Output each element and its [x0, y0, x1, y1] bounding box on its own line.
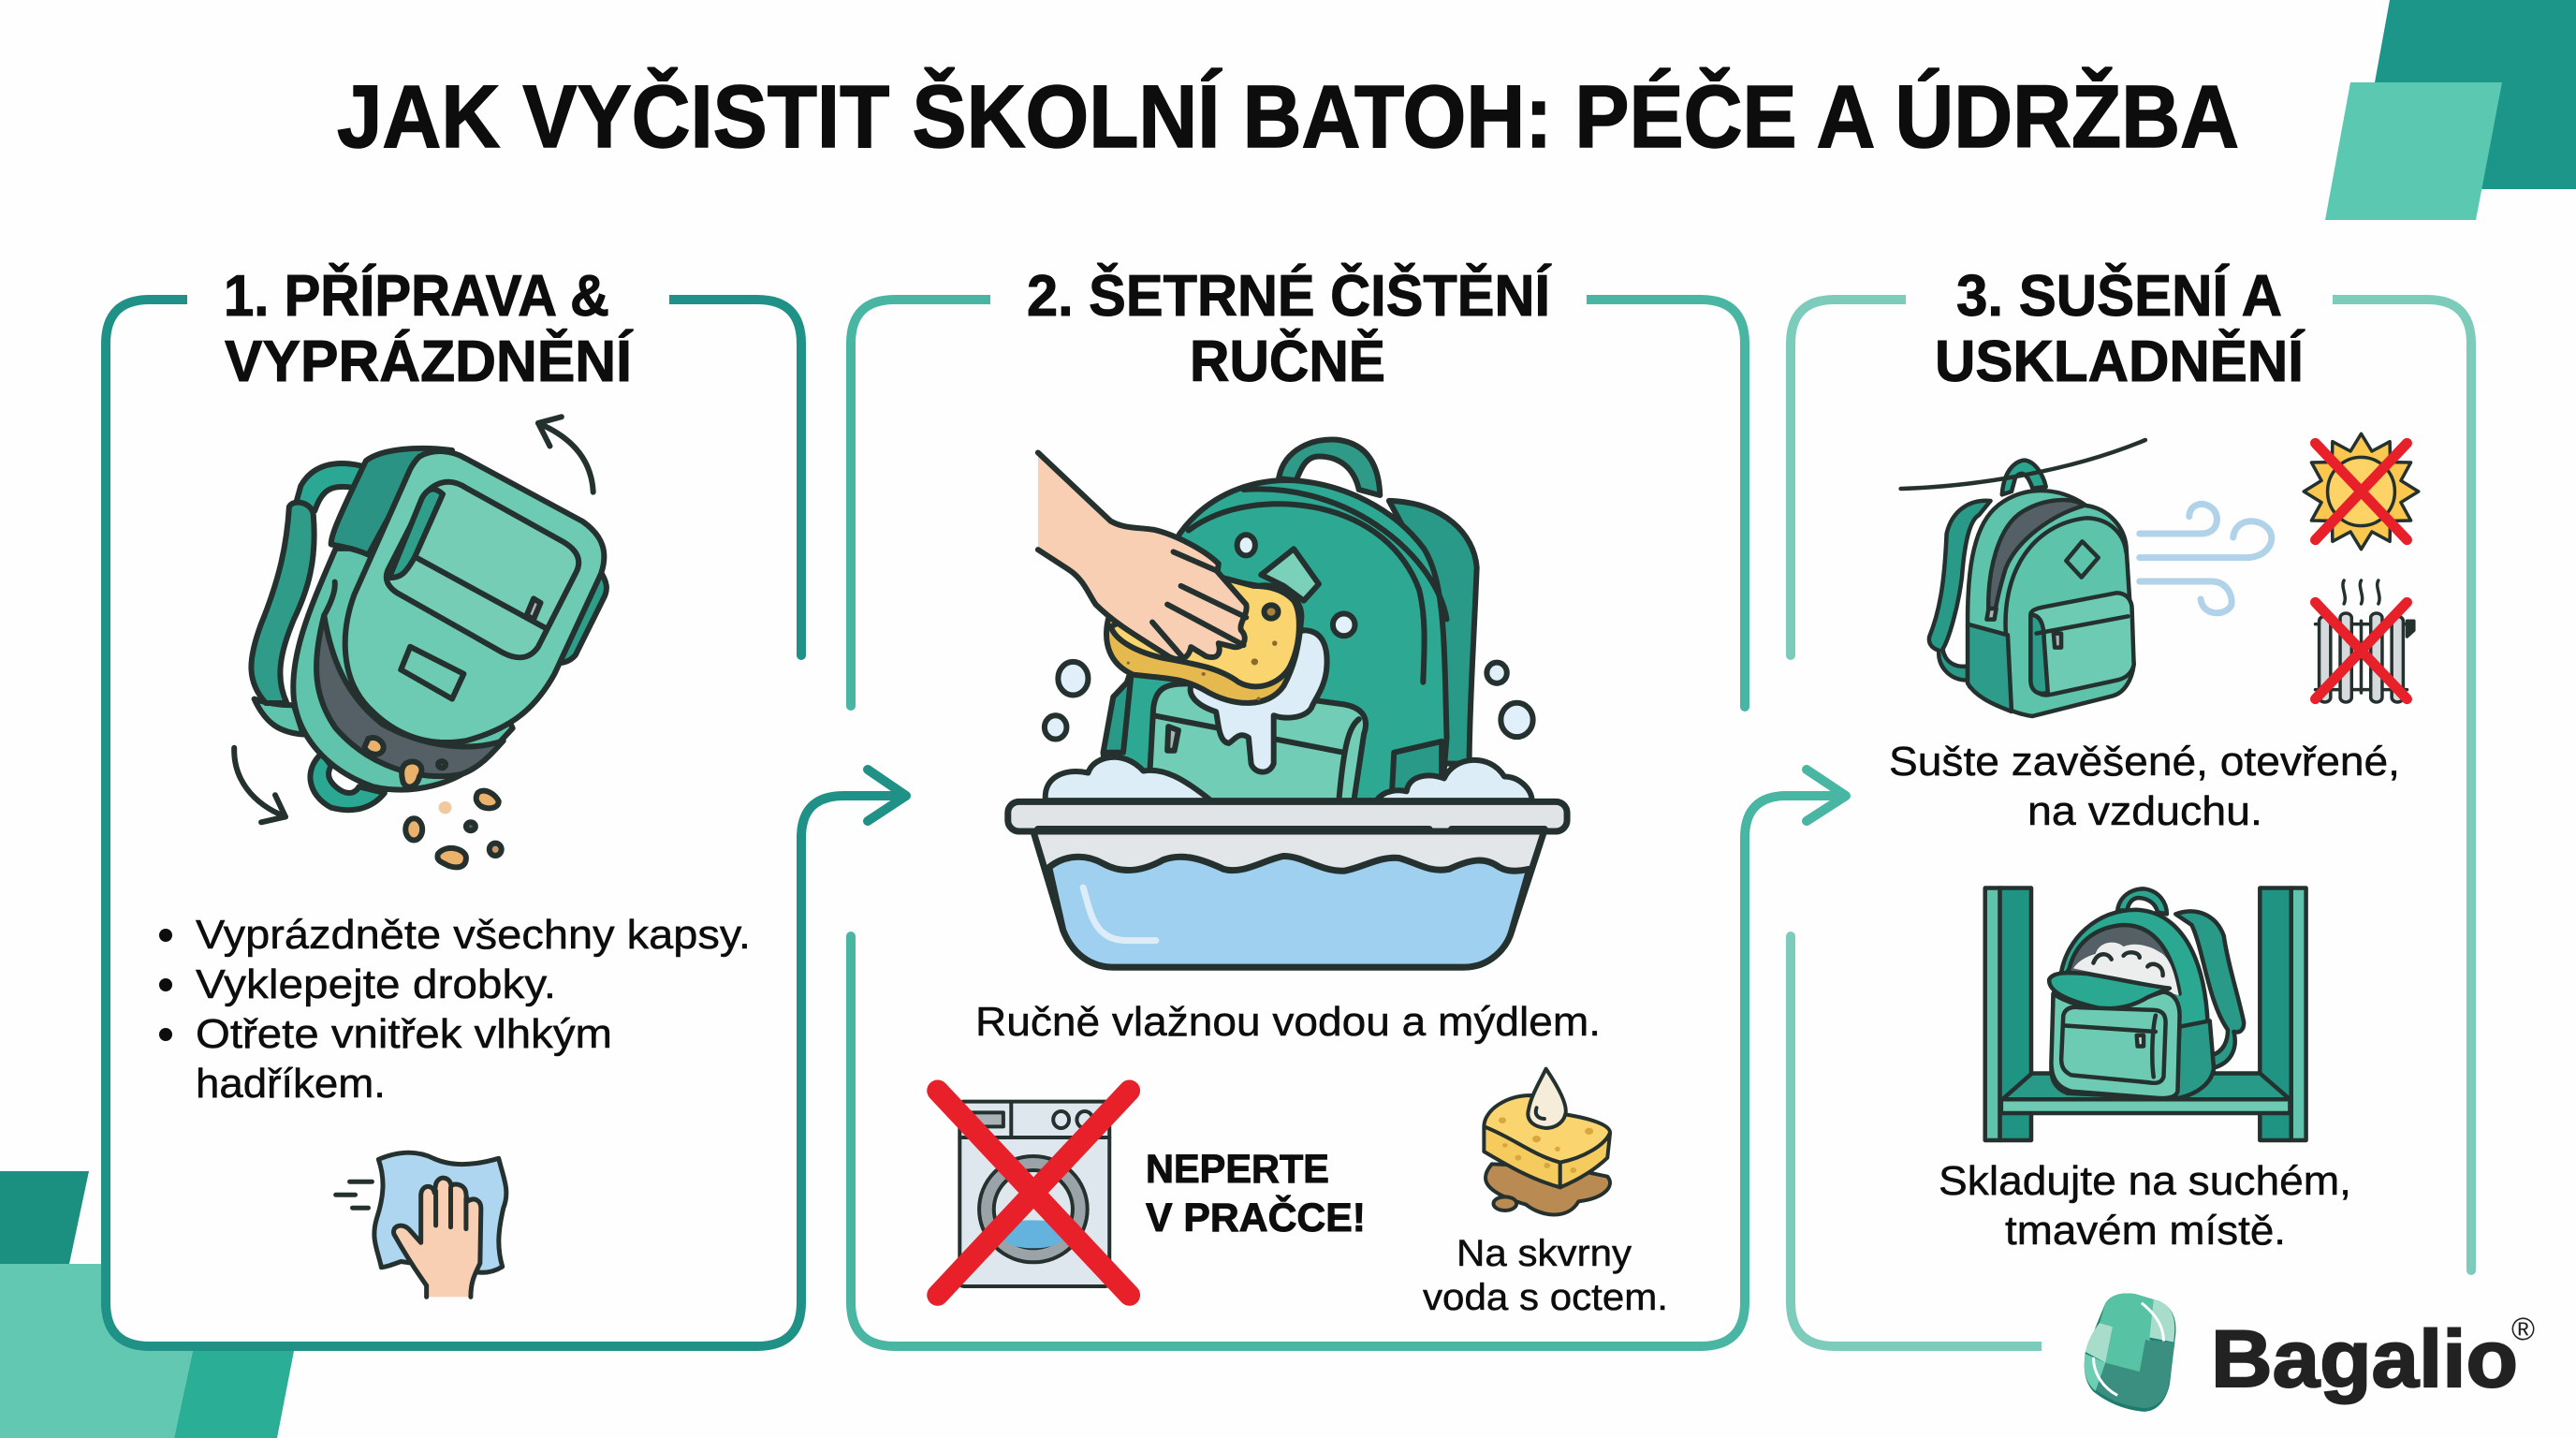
text: step 1 bullet list: Otřete vnitřek vlhkým	[196, 1011, 612, 1057]
heading: step 3	[1935, 264, 2305, 394]
panel 3 border	[1791, 300, 2471, 1346]
logo: Bagalio	[2085, 1294, 2535, 1412]
icon: sponge with vinegar drop on stain	[1484, 1069, 1610, 1214]
decoration: bottom left corner shapes	[0, 1171, 294, 1438]
text: storage instruction	[1939, 1158, 2351, 1254]
text: drying instruction: na vzduchu.	[2027, 788, 2262, 834]
warning: do not machine wash: NEPERTE	[1146, 1147, 1329, 1192]
panel: step 2 gentle hand washing	[851, 264, 1846, 1346]
icon: backpack washed with sponge in basin	[1008, 439, 1567, 967]
logo: Bagalio: Bagalio	[2211, 1314, 2518, 1404]
decoration: top right corner shapes	[2325, 0, 2576, 220]
warning: do not machine wash	[1146, 1147, 1366, 1240]
icon: crossed out radiator	[2316, 580, 2414, 702]
icon: crossed out washing machine	[938, 1091, 1130, 1295]
text: storage instruction: tmavém místě.	[2005, 1208, 2286, 1254]
text: stain tip: Na skvrny	[1456, 1233, 1632, 1274]
foam in basin	[1046, 757, 1211, 800]
crumbs	[364, 738, 502, 867]
panel 2 border and arrow to step 3	[851, 300, 1846, 1346]
text: drying instruction	[1889, 739, 2400, 834]
heading: step 2: RUČNĚ	[1190, 330, 1385, 394]
hand	[1038, 452, 1247, 659]
icon: backpack hanging on clothesline with wind	[1901, 440, 2272, 716]
heading: step 3: 3. SUŠENÍ A	[1956, 264, 2282, 329]
panel: step 1 preparation	[106, 264, 906, 1346]
wind lines	[2140, 504, 2272, 613]
title: JAK VYČISTIT ŠKOLNÍ BATOH: PÉČE A ÚDRŽBA	[337, 67, 2239, 167]
text: step 1 bullet list: Vyprázdněte všechny kapsy.	[196, 912, 751, 958]
text: storage instruction: Skladujte na suchém,	[1939, 1158, 2351, 1204]
text: stain tip: voda s octem.	[1423, 1277, 1668, 1318]
text: step 1 bullet list: Vyklepejte drobky.	[196, 961, 556, 1007]
text: step 1 bullet list: hadříkem.	[196, 1061, 386, 1107]
logo: Bagalio: ®	[2511, 1312, 2535, 1347]
bubbles	[1045, 662, 1533, 740]
text: drying instruction: Sušte zavěšené, otevřené,	[1889, 739, 2400, 785]
heading: step 1: VYPRÁZDNĚNÍ	[225, 330, 634, 394]
foam on backpack	[1191, 630, 1327, 772]
text: hand wash instruction: Ručně vlažnou vodou a mýdlem.	[975, 999, 1601, 1045]
heading: step 1	[224, 264, 634, 394]
icon: backpack tipped upside down with crumbs	[234, 417, 607, 867]
basin	[1033, 830, 1544, 967]
icon: logo gem	[2085, 1294, 2175, 1412]
text: stain tip	[1423, 1233, 1668, 1318]
icon: backpack on shelf	[1985, 888, 2306, 1140]
icon: hand wiping with cloth	[336, 1152, 506, 1297]
heading: step 2	[1027, 264, 1552, 394]
heading: step 3: USKLADNĚNÍ	[1935, 330, 2305, 394]
panel: step 3 drying and storage	[1791, 264, 2471, 1346]
heading: step 1: 1. PŘÍPRAVA &	[224, 264, 609, 329]
panel 1 border and arrow to step 2	[106, 300, 906, 1346]
text: step 1 bullet list	[159, 912, 751, 1107]
icon: crossed out sun	[2304, 433, 2419, 550]
sponge	[1106, 579, 1301, 703]
warning: do not machine wash: V PRAČCE!	[1146, 1195, 1366, 1240]
heading: step 2: 2. ŠETRNÉ ČIŠTĚNÍ	[1027, 264, 1552, 329]
arrows: rotation	[234, 417, 593, 822]
